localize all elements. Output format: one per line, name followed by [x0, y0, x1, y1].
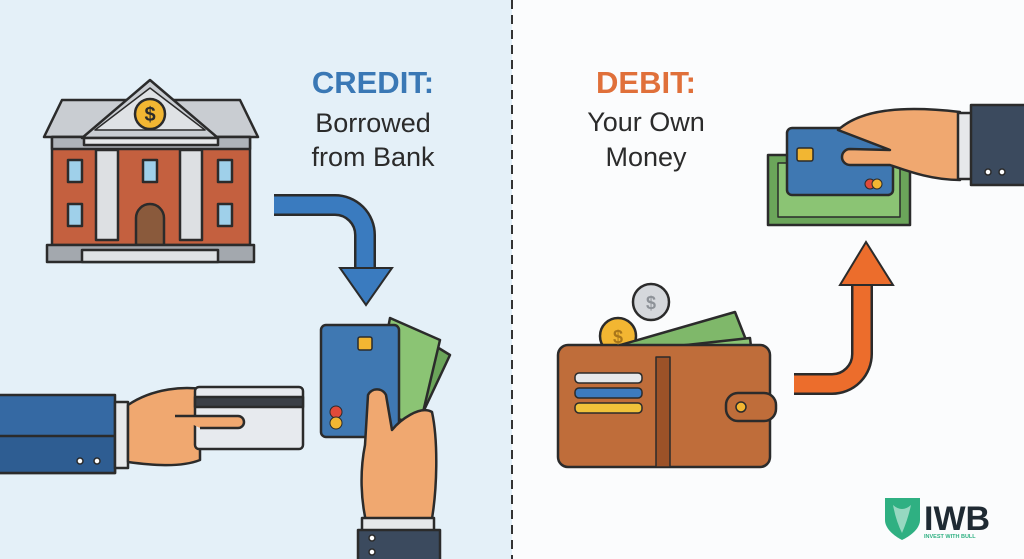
panel: debit: $ [646, 293, 656, 313]
icon: wallet with coins [558, 284, 776, 467]
logo: IWB: INVEST WITH BULL [924, 534, 976, 540]
icon: bank building [44, 80, 258, 262]
panel: debit: $ [613, 327, 623, 347]
icon: hand with card and cash [768, 105, 1024, 225]
logo: IWB [885, 498, 990, 540]
icon: hand holding card (left) [0, 387, 303, 473]
panel: debit [558, 65, 1024, 540]
icon: hand holding card and cash (right) [321, 318, 450, 559]
heading: credit [311, 65, 435, 172]
panel: credit: $ [144, 104, 156, 126]
heading: debit: Your Own [587, 107, 705, 137]
logo: IWB: IWB [924, 500, 990, 538]
heading: credit: Borrowed [315, 108, 431, 138]
arrow: blue down [274, 205, 392, 305]
heading: debit [587, 65, 705, 172]
heading: debit: DEBIT: [596, 65, 696, 100]
panel: credit [0, 65, 450, 559]
heading: credit: from Bank [311, 142, 435, 172]
arrow: orange up [794, 242, 893, 384]
heading: credit: CREDIT: [312, 65, 434, 100]
heading: debit: Money [605, 142, 687, 172]
